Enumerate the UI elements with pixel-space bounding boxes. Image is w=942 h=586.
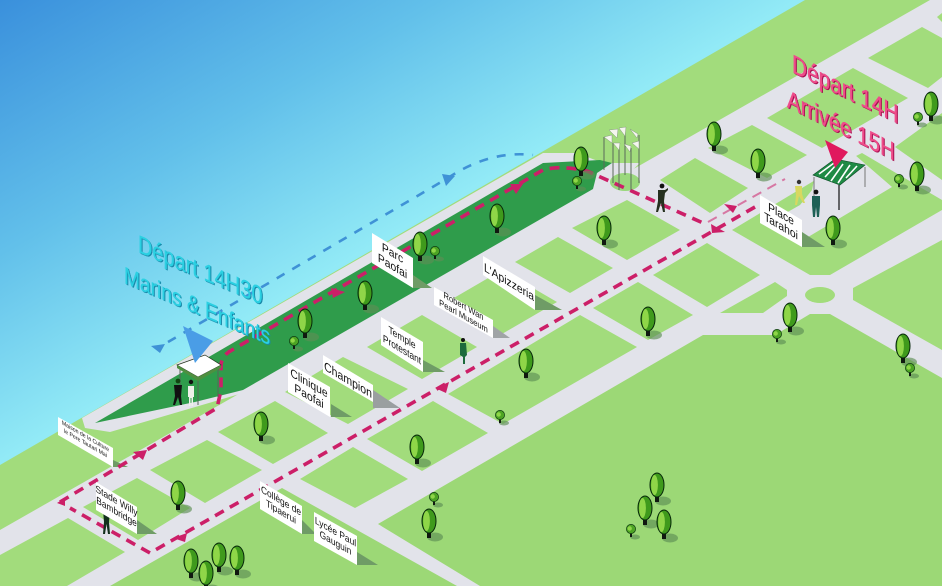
blue arrow head start — [151, 344, 165, 353]
sign: collège de tipaerui: Tipaerui — [266, 498, 296, 527]
flag circle — [610, 173, 640, 191]
figures at start tent — [173, 379, 194, 406]
sign: robert wan pearl museum: Pearl Museum — [439, 297, 488, 335]
blue route arrow — [442, 174, 455, 186]
sign: stade willy bambridge: Bambridge — [96, 495, 137, 530]
sign: lycée paul gauguin — [314, 512, 357, 565]
sign: place tarahoi: Place — [768, 199, 794, 229]
sign: stade willy bambridge: Stade Willy — [96, 483, 138, 520]
sign: stade willy bambridge — [96, 482, 138, 534]
trees — [171, 92, 942, 586]
blue dashed route — [151, 154, 533, 353]
sign: lycée paul gauguin: Lycée Paul — [315, 515, 356, 550]
sign: clinique paofai — [288, 363, 330, 417]
sign: place tarahoi — [760, 195, 802, 247]
icon: pink arrival marker — [825, 140, 848, 168]
sign: champion: Champion — [324, 359, 372, 401]
place tarahoi plaza — [770, 155, 892, 243]
route arrowheads — [57, 184, 737, 542]
sign: robert wan pearl museum: Robert Wan — [443, 289, 484, 323]
flag poles — [604, 127, 639, 190]
sign: maison de la culture: le Pere Tautari Mai — [64, 429, 107, 459]
sign: maison de la culture: Maison de la Culture — [62, 420, 110, 454]
cyan heading: départ 14h30 marins et enfants: Marins & Enfants — [124, 262, 270, 350]
sign: place tarahoi: Tarahoi — [764, 209, 798, 243]
sign: parc paofai — [372, 233, 413, 288]
sign: parc paofai: Parc — [382, 240, 403, 266]
sign: maison de la culture — [58, 417, 113, 467]
sign: robert wan pearl museum — [434, 287, 493, 338]
flags — [604, 127, 639, 152]
sign: parc paofai: Paofai — [378, 250, 407, 282]
pink heading: départ 14h arrivée 15h — [787, 50, 898, 167]
coastal promenade — [82, 153, 640, 432]
white start tent — [177, 355, 221, 405]
striped arrival tent — [813, 159, 865, 210]
sign: temple protestant — [381, 317, 423, 372]
icon: blue start marker — [183, 326, 213, 363]
sign: clinique paofai: Clinique — [290, 365, 328, 401]
sign: temple protestant: Protestant — [383, 333, 421, 368]
sign: lycée paul gauguin: Gauguin — [320, 529, 351, 558]
cyan heading: départ 14h30 marins et enfants: Départ 14H30 — [138, 230, 262, 310]
sign: l'apizzeria: L'Apizzeria — [484, 260, 534, 304]
pink heading: départ 14h arrivée 15h: Arrivée 15H — [787, 85, 895, 167]
parc paofai green area — [95, 160, 612, 423]
sign shadows — [113, 232, 825, 565]
magenta route: outbound and return — [60, 168, 785, 553]
sign: clinique paofai: Paofai — [294, 380, 324, 412]
sign: collège de tipaerui — [260, 481, 302, 534]
pink heading: départ 14h arrivée 15h: Départ 14H — [792, 50, 898, 130]
sign: temple protestant: Temple — [388, 325, 416, 352]
walker figures — [103, 180, 820, 534]
sign: collège de tipaerui: Collège de — [261, 484, 301, 519]
